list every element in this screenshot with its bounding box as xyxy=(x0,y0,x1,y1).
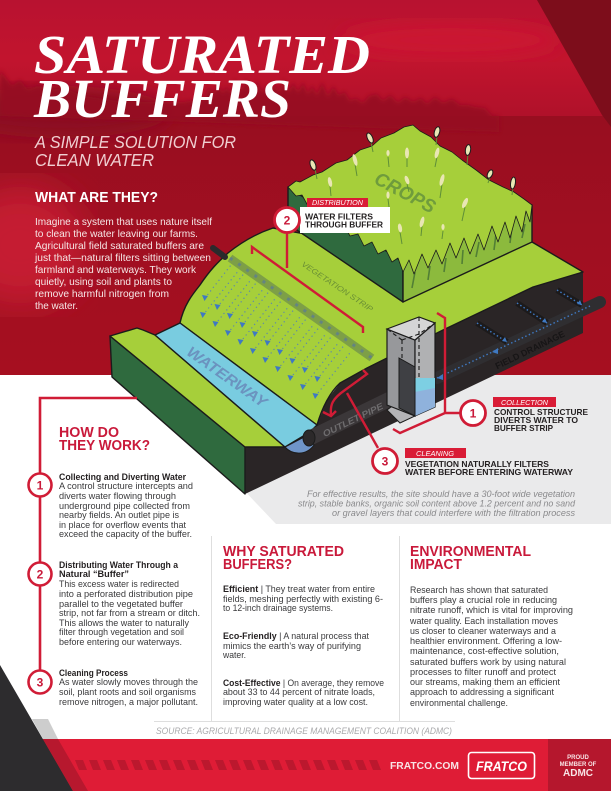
hero background: red field photo xyxy=(0,0,611,375)
footer band xyxy=(0,739,611,791)
field drainage pipes: FIELD DRAINAGE xyxy=(494,329,566,371)
step 3 text: remove nitrogen, a major pollutant. xyxy=(59,696,198,707)
callout 2: distribution: 2 xyxy=(284,214,291,228)
arrow: bracket to vegetation strip xyxy=(252,247,363,333)
callout 1: collection: 1 xyxy=(470,406,477,420)
callout 2: distribution xyxy=(274,198,390,233)
site requirements note: strip, stable banks, organic soil content above 1.2 percent and no sand xyxy=(298,498,576,508)
front bank top xyxy=(110,328,285,447)
heading: what are they: WHAT ARE THEY? xyxy=(35,189,158,206)
leader from circle 3 xyxy=(347,393,378,448)
environmental impact paragraph: saturated buffers work by using natural xyxy=(410,656,566,667)
callout 3: cleaning: 3 xyxy=(382,454,389,468)
corner shapes: diagonal stripes xyxy=(0,665,88,791)
subtitle: CLEAN WATER xyxy=(35,150,154,170)
waterway channel xyxy=(155,323,317,453)
environmental impact paragraph: our streams, making them an efficient xyxy=(410,676,560,687)
panel: why saturated buffers xyxy=(222,544,384,707)
environmental impact paragraph: nitrate runoff, which is vital for improving xyxy=(410,604,573,615)
step 1 text: underground pipe collected from xyxy=(59,500,190,511)
waterway channel: WATERWAY xyxy=(183,343,272,413)
step 2 text: parallel to the vegetated buffer xyxy=(59,598,183,609)
intro paragraph: Imagine a system that uses nature itself xyxy=(35,217,212,228)
step 2 text: into a perforated distribution pipe xyxy=(59,588,193,599)
callout 1: collection: COLLECTION xyxy=(501,398,549,407)
field drainage pipes xyxy=(437,290,600,380)
environmental impact paragraph: healthier environment. Offering a low- xyxy=(410,635,562,646)
heading: environmental impact xyxy=(410,544,531,573)
logo: Fratco: FRATCO xyxy=(476,758,527,774)
crop plants xyxy=(309,126,516,244)
callout 3: cleaning: VEGETATION NATURALLY FILTERS xyxy=(405,460,550,469)
title xyxy=(33,24,370,129)
distribution pipe stub xyxy=(213,248,225,257)
arrow: water flow curved xyxy=(323,370,367,416)
step 1 marker: 1 xyxy=(37,478,44,492)
benefit: eco-friendly: mimics the earth’s way of purifying xyxy=(223,640,361,651)
heading: why saturated buffers: BUFFERS? xyxy=(223,557,292,573)
site requirements note xyxy=(298,488,576,518)
grey backdrop panel behind diagram xyxy=(220,375,611,524)
member badge: PROUD xyxy=(567,755,589,761)
step 1 marker xyxy=(28,474,52,496)
source line: SOURCE: AGRICULTURAL DRAINAGE MANAGEMENT COALITION (ADMC) xyxy=(156,726,452,737)
crops label: CROPS xyxy=(371,169,439,218)
benefit: efficient: Efficient | They treat water from entire xyxy=(223,583,375,594)
soil cross-section xyxy=(245,272,583,494)
benefit: eco-friendly: Eco-Friendly | A natural process that xyxy=(223,630,369,641)
heading: why saturated buffers: WHY SATURATED xyxy=(223,544,344,560)
callout 3: cleaning: CLEANING xyxy=(416,449,454,458)
environmental impact paragraph: Research has shown that saturated xyxy=(410,584,548,595)
benefit: eco-friendly xyxy=(222,630,369,660)
website: FRATCO.COM xyxy=(390,760,459,772)
step 3 marker: 3 xyxy=(37,676,44,690)
heading: why saturated buffers xyxy=(223,544,344,573)
arrow: bracket around control structure xyxy=(393,313,462,433)
intro paragraph: just that—natural filters sitting between xyxy=(34,253,211,264)
benefit: cost-effective xyxy=(223,677,384,707)
environmental impact paragraph: approach to addressing a significant xyxy=(410,686,554,697)
outlet pipe xyxy=(303,398,392,446)
step 1 text: in place for overflow events that xyxy=(59,519,186,530)
benefit: eco-friendly: water. xyxy=(222,649,246,660)
title: SATURATED xyxy=(34,24,370,85)
intro paragraph xyxy=(34,217,212,312)
step 2 marker: 2 xyxy=(37,568,44,582)
subtitle: A SIMPLE SOLUTION FOR xyxy=(34,132,236,152)
callout 3: cleaning: WATER BEFORE ENTERING WATERWAY xyxy=(405,468,574,477)
leader from circle 2 xyxy=(286,232,288,268)
step 1 text: A control structure intercepts and xyxy=(59,480,193,491)
member badge xyxy=(560,755,597,779)
outlet pipe: OUTLET PIPE xyxy=(321,401,386,439)
environmental impact paragraph: water quality. Each installation moves xyxy=(409,615,558,626)
step 2 text: before entering our waterways. xyxy=(59,636,182,647)
heading: environmental impact: ENVIRONMENTAL xyxy=(410,544,531,560)
crops block xyxy=(288,125,532,302)
environmental impact paragraph: maintenance, cost-effective solution, xyxy=(410,645,559,656)
callout 1: collection: CONTROL STRUCTURE xyxy=(494,408,589,417)
step 2 text: filter through vegetation and soil xyxy=(59,626,184,637)
intro paragraph: quietly, using soil and plants to xyxy=(35,277,172,288)
intro paragraph: Agricultural field saturated buffers are xyxy=(35,241,204,252)
field surface xyxy=(180,228,583,425)
environmental impact paragraph xyxy=(409,584,573,708)
perforated distribution strip xyxy=(230,258,372,358)
member badge: MEMBER OF xyxy=(560,762,597,768)
callout 1: collection: DIVERTS WATER TO xyxy=(494,416,579,425)
benefit: cost-effective: Cost-Effective | On average, they remove xyxy=(223,677,384,688)
step 2 text xyxy=(59,559,200,647)
callout 1: collection xyxy=(460,397,589,433)
callout 3: cleaning xyxy=(372,448,574,477)
callout 2: distribution: THROUGH BUFFER xyxy=(305,220,383,230)
step 2 text: This allows the water to naturally xyxy=(59,617,189,628)
step 1 text: diverts water flowing through xyxy=(59,490,176,501)
site requirements note: or gravel layers that could interfere with the filtration process xyxy=(332,507,575,518)
heading: how do they work xyxy=(59,425,150,454)
environmental impact paragraph: environmental challenge. xyxy=(410,697,508,708)
step 1 text: exceed the capacity of the buffer. xyxy=(59,528,192,539)
callout 2: distribution: DISTRIBUTION xyxy=(312,198,364,207)
environmental impact paragraph: processes to filter runoff and protect xyxy=(410,666,556,677)
panel: how do they work timeline xyxy=(28,398,200,707)
benefit: cost-effective: about 33 to 44 percent of nitrate loads, xyxy=(223,686,375,697)
vegetation strip label: VEGETATION STRIP xyxy=(300,260,375,314)
logo: Fratco xyxy=(468,752,534,778)
step 1 text xyxy=(59,471,193,539)
panel: environmental impact xyxy=(409,544,573,708)
step 3 text: soil, plant roots and soil organisms xyxy=(59,686,196,697)
intro paragraph: to clean the water leaving our farms. xyxy=(35,229,198,240)
environmental impact paragraph: buffers play a crucial role in reducing xyxy=(410,594,557,605)
step 3 text: Cleaning Process xyxy=(59,667,128,678)
front bank face xyxy=(110,336,245,494)
callout 1: collection: BUFFER STRIP xyxy=(494,424,554,433)
benefit: efficient: fields, meshing perfectly with existing 6- xyxy=(223,593,383,604)
tire track pattern xyxy=(75,760,381,770)
title: BUFFERS xyxy=(33,68,291,129)
step 3 text xyxy=(59,667,198,707)
step 3 marker xyxy=(28,670,52,694)
step 2 marker xyxy=(28,562,52,586)
step 2 text: strip, not far from a stream or ditch. xyxy=(59,607,200,618)
control structure xyxy=(387,317,435,423)
intro paragraph: farmland and waterways. They work xyxy=(35,265,197,276)
intro paragraph: the water. xyxy=(35,301,78,312)
intro paragraph: remove harmful nitrogen from xyxy=(35,289,169,300)
callout 2: distribution: WATER FILTERS xyxy=(305,212,374,222)
heading: environmental impact: IMPACT xyxy=(410,557,462,573)
member badge: ADMC xyxy=(563,768,593,779)
heading: how do they work: HOW DO xyxy=(59,425,119,441)
step 3 text: As water slowly moves through the xyxy=(59,676,198,687)
benefit: efficient: to 12-inch drainage systems. xyxy=(223,602,333,613)
step 1 text: nearby fields. An outlet pipe is xyxy=(59,509,179,520)
environmental impact paragraph: us closer to cleaner waterways and a xyxy=(410,625,557,636)
step 1 text: Collecting and Diverting Water xyxy=(59,471,186,482)
water flow arrows xyxy=(200,265,352,399)
step 2 text: This excess water is redirected xyxy=(59,578,179,589)
benefit: cost-effective: improving water quality at a low cost. xyxy=(223,696,368,707)
site requirements note: For effective results, the site should have a 30-foot wide vegetation xyxy=(307,488,575,499)
step 2 text: Natural “Buffer” xyxy=(59,568,129,579)
step 2 text: Distributing Water Through a xyxy=(59,559,179,570)
heading: how do they work: THEY WORK? xyxy=(59,438,150,454)
benefit: efficient xyxy=(223,583,383,613)
infographic diagram: buffer cross-section xyxy=(110,125,600,494)
subtitle xyxy=(34,132,236,170)
